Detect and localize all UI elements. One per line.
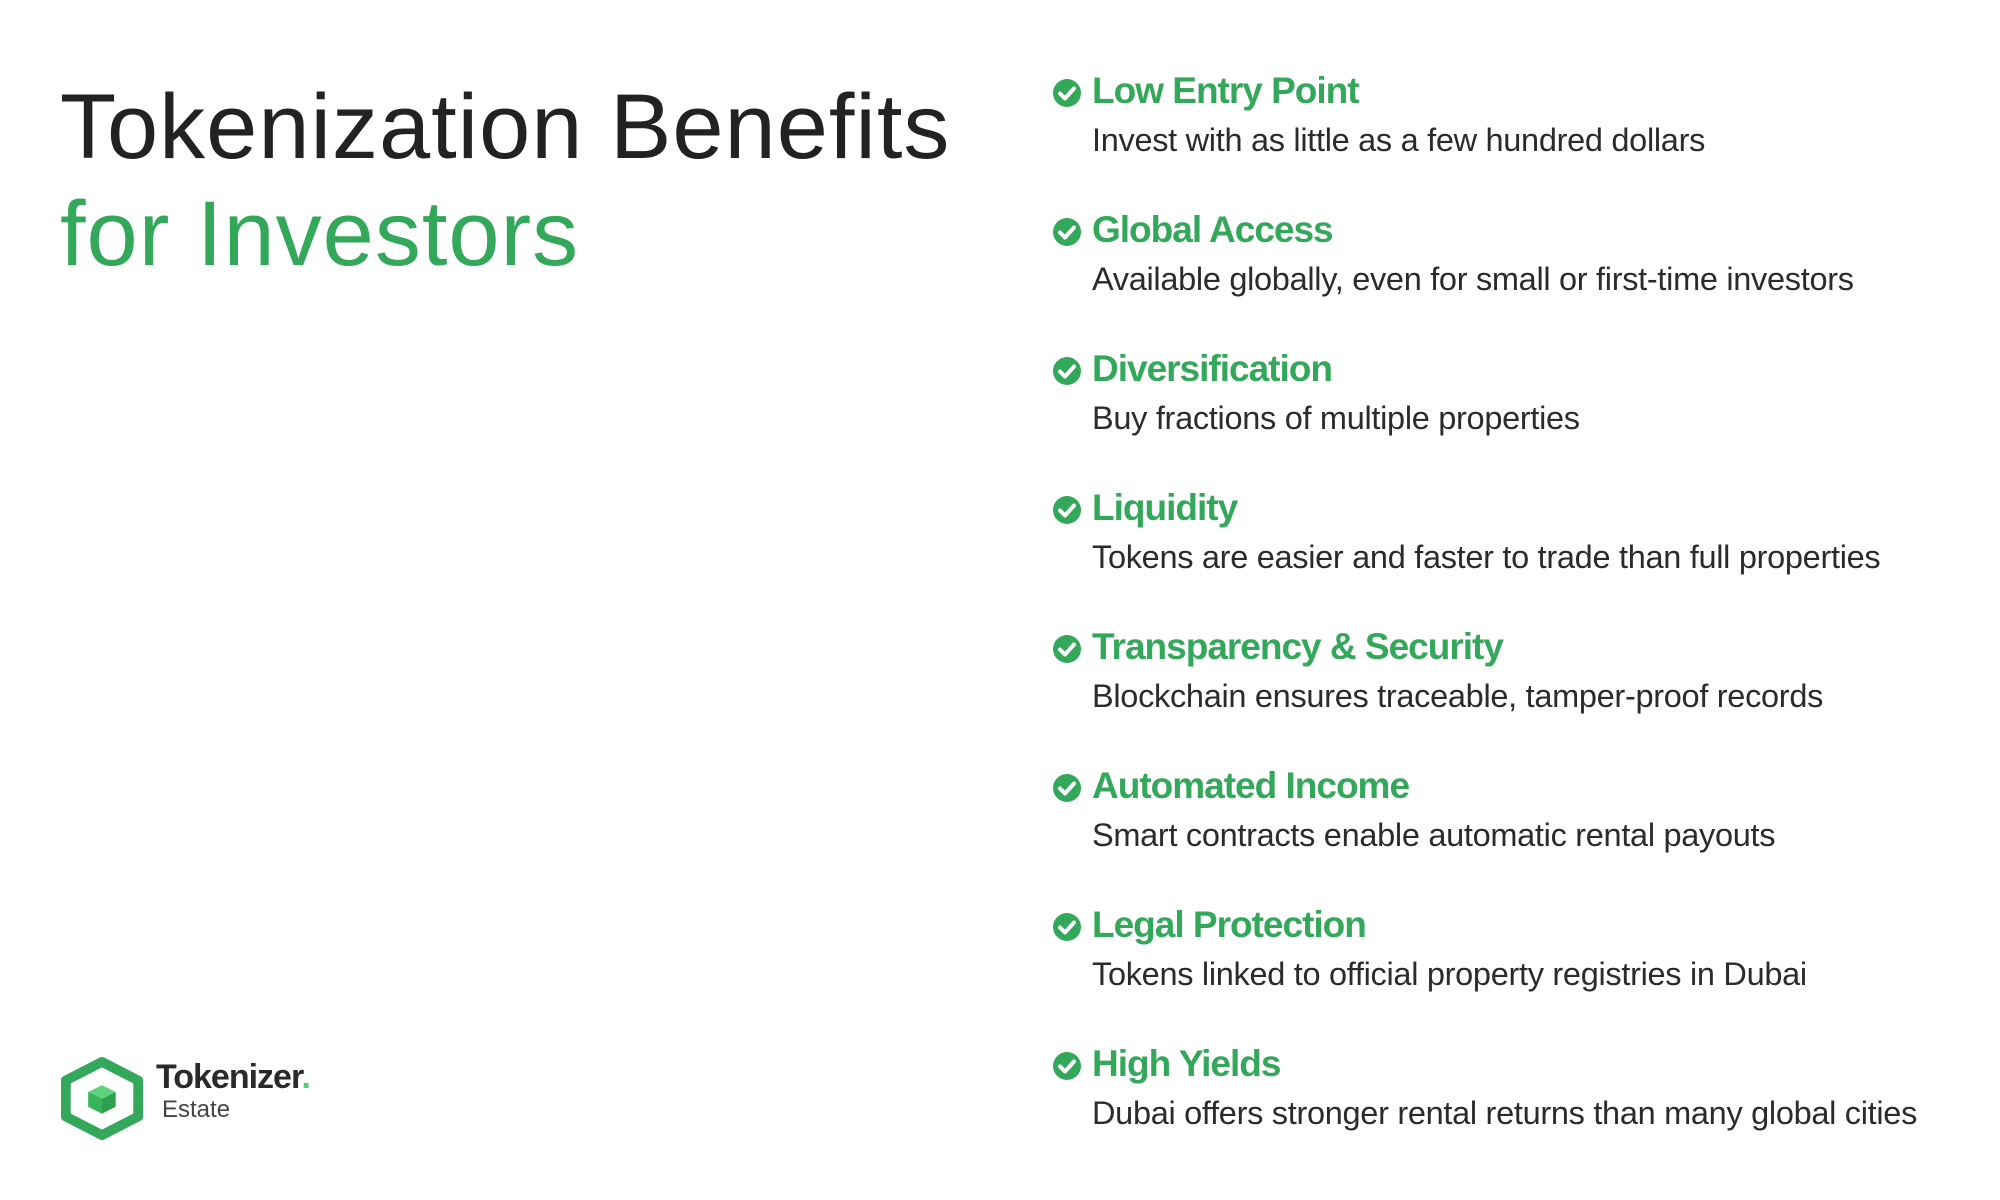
item: automated income [1053, 765, 1775, 853]
item: low entry point: Invest with as little as a few hundred dollars [1092, 122, 1705, 158]
logo: Estate [162, 1096, 230, 1123]
title: for Investors [60, 183, 579, 285]
item: transparency [1053, 626, 1823, 714]
item: transparency: Transparency & Security [1092, 626, 1503, 667]
item: global access [1053, 209, 1854, 297]
item: automated income: Smart contracts enable automatic rental payouts [1092, 817, 1775, 853]
logo text: Tokenizer. [156, 1058, 310, 1096]
icon: house hexagon [60, 1057, 144, 1140]
item: low entry point: Low Entry Point [1092, 70, 1359, 111]
title: Tokenization Benefits [60, 76, 950, 178]
title [60, 76, 950, 285]
item: legal protection: Tokens linked to official property registries in Dubai [1092, 956, 1807, 992]
item: liquidity: Liquidity [1092, 487, 1237, 528]
item: liquidity [1053, 487, 1880, 575]
item: diversification: Buy fractions of multiple properties [1092, 400, 1580, 436]
item: diversification [1053, 348, 1580, 436]
logo [60, 1057, 310, 1140]
item: high yields [1053, 1043, 1917, 1131]
item: global access: Global Access [1092, 209, 1333, 250]
item: diversification: Diversification [1092, 348, 1332, 389]
item: high yields: Dubai offers stronger rental returns than many global cities [1092, 1095, 1917, 1131]
item: high yields: High Yields [1092, 1043, 1280, 1084]
item: liquidity: Tokens are easier and faster to trade than full properties [1092, 539, 1880, 575]
item: low entry point [1053, 70, 1705, 158]
item: legal protection [1053, 904, 1807, 992]
item: automated income: Automated Income [1092, 765, 1409, 806]
item: legal protection: Legal Protection [1092, 904, 1366, 945]
item: global access: Available globally, even for small or first-time investors [1092, 261, 1854, 297]
item: transparency: Blockchain ensures traceable, tamper-proof records [1092, 678, 1823, 714]
